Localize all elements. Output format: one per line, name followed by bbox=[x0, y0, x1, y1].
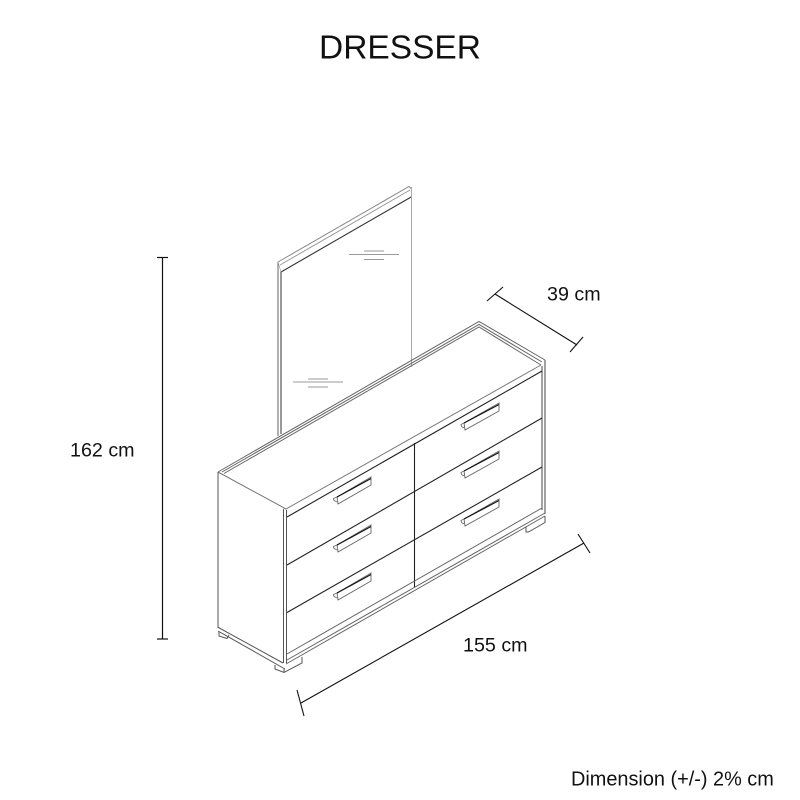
handle: right middle bbox=[461, 451, 499, 478]
dresser body bbox=[218, 322, 545, 672]
drawer fronts bbox=[287, 371, 542, 612]
foot: front left bbox=[275, 657, 302, 672]
dimension: height label: 162 cm bbox=[70, 440, 135, 462]
title: DRESSER bbox=[319, 30, 481, 66]
tolerance note: Dimension (+/-) 2% cm bbox=[571, 768, 774, 790]
handle: left middle bbox=[334, 525, 371, 552]
mirror reflection: lower bbox=[293, 379, 343, 387]
plinth bbox=[286, 508, 545, 664]
drawer handles bbox=[334, 403, 499, 600]
foot: back right bbox=[526, 516, 545, 532]
handle: left top bbox=[334, 477, 371, 504]
handle: left bottom bbox=[334, 573, 371, 600]
dimension: width label: 155 cm bbox=[463, 634, 528, 656]
dresser top bbox=[218, 322, 545, 509]
handle: right bottom bbox=[461, 499, 499, 526]
dimension: depth arrow bbox=[487, 287, 583, 352]
side panel bbox=[218, 472, 286, 669]
dimension: depth label: 39 cm bbox=[547, 284, 601, 306]
dimension: width arrow bbox=[297, 534, 590, 716]
foot: back left bbox=[219, 632, 229, 638]
mirror bbox=[278, 186, 412, 436]
handle: right top bbox=[461, 403, 499, 430]
dimension: height arrow bbox=[157, 257, 168, 639]
mirror reflection: upper bbox=[349, 251, 399, 260]
right edge bbox=[542, 360, 545, 514]
